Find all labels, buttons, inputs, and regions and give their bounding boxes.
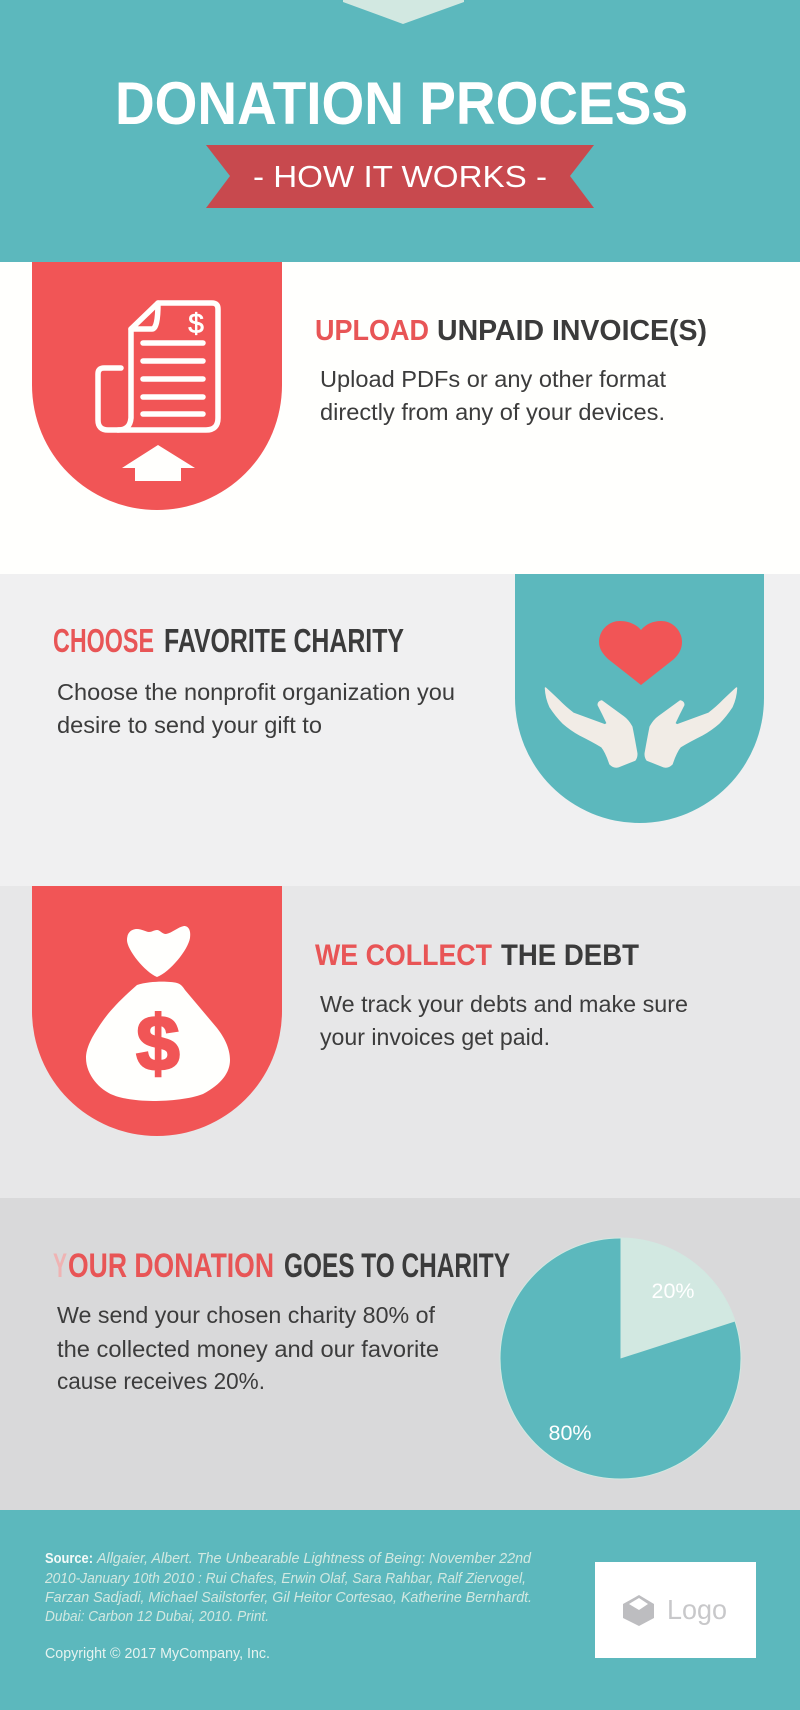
panel: footer (0, 1510, 800, 1710)
icon: upload arrow (122, 445, 195, 481)
logo box (595, 1562, 756, 1658)
text: step 2 body: Choose the nonprofit organization you (57, 679, 455, 705)
text: step 1 body: Upload PDFs or any other format (320, 366, 667, 392)
logo text: Logo (667, 1594, 727, 1625)
text: step 3 body: your invoices get paid. (320, 1024, 550, 1050)
shield: step 3 (32, 886, 282, 1136)
label: 80%: 80% (548, 1422, 592, 1445)
panel: step 1 upload (0, 262, 800, 574)
heading: step 2: FAVORITE CHARITY (164, 622, 404, 659)
icon: money bag: $ (136, 999, 180, 1087)
heading: step 4: GOES TO CHARITY (284, 1247, 510, 1285)
icon: dollar sign on invoice: $ (188, 308, 204, 339)
heading: step 3: THE DEBT (501, 939, 639, 972)
heading: step 1: UPLOAD (315, 315, 429, 347)
label: 20%: 20% (652, 1280, 694, 1303)
text: step 4 body: We send your chosen charity 80% of (57, 1302, 436, 1328)
heading: step 2 (53, 622, 404, 659)
heading: step 2: CHOOSE (53, 622, 154, 659)
heading: step 4: Y (53, 1247, 67, 1285)
icon: heart (599, 621, 682, 685)
text: step 2 body (57, 679, 455, 738)
heading: step 1 (315, 315, 707, 347)
panel: step 2 choose (0, 574, 800, 886)
pie slice: 20% (620, 1238, 735, 1358)
icon: money bag (86, 926, 230, 1101)
icon: hands (546, 688, 736, 767)
ribbon subtitle: - HOW IT WORKS - (253, 159, 547, 194)
text: sources: 2010-January 10th 2010 : Rui Chafes, Erwin Olaf, Sara Rahbar, Ralf Ziervogel, (44, 1570, 526, 1587)
shield: step 2 (515, 574, 764, 823)
text: sources: Source: (45, 1550, 93, 1567)
panel: header (0, 0, 800, 262)
ribbon subtitle (206, 145, 594, 208)
text: step 3 body: We track your debts and make sure (320, 991, 688, 1017)
text: step 2 body: desire to send your gift to (57, 712, 322, 738)
text: sources: Allgaier, Albert. The Unbearable Lightness of Being: November 22nd (96, 1550, 532, 1567)
title: DONATION PROCESS (115, 70, 688, 137)
panel: step 3 collect (0, 886, 800, 1198)
text: sources (44, 1550, 532, 1625)
panel: step 4 donation (0, 1198, 800, 1510)
icon: logo cube (623, 1595, 654, 1626)
shield: step 1 (32, 262, 282, 510)
text: step 3 body (320, 991, 688, 1050)
icon: invoice (98, 303, 218, 430)
text: sources: Dubai: Carbon 12 Dubai, 2010. Print. (45, 1608, 269, 1625)
heading: step 1: UNPAID INVOICE(S) (437, 315, 707, 347)
text: step 4 body (57, 1302, 439, 1394)
text: sources: Farzan Sadjadi, Michael Sailstorfer, Gil Heitor Cortesao, Katherine Bernhardt. (45, 1589, 532, 1606)
text: copyright: Copyright © 2017 MyCompany, Inc. (45, 1645, 270, 1662)
text: step 1 body (320, 366, 667, 425)
heading: step 4 (53, 1247, 510, 1285)
heading: step 3: WE COLLECT (315, 939, 492, 972)
text: step 4 body: the collected money and our favorite (57, 1336, 439, 1362)
pie chart (500, 1238, 741, 1479)
text: step 1 body: directly from any of your devices. (320, 399, 665, 425)
heading: step 3 (315, 939, 639, 972)
text: step 4 body: cause receives 20%. (57, 1368, 265, 1394)
chevron tab (343, 0, 464, 24)
heading: step 4: OUR DONATION (68, 1247, 274, 1285)
